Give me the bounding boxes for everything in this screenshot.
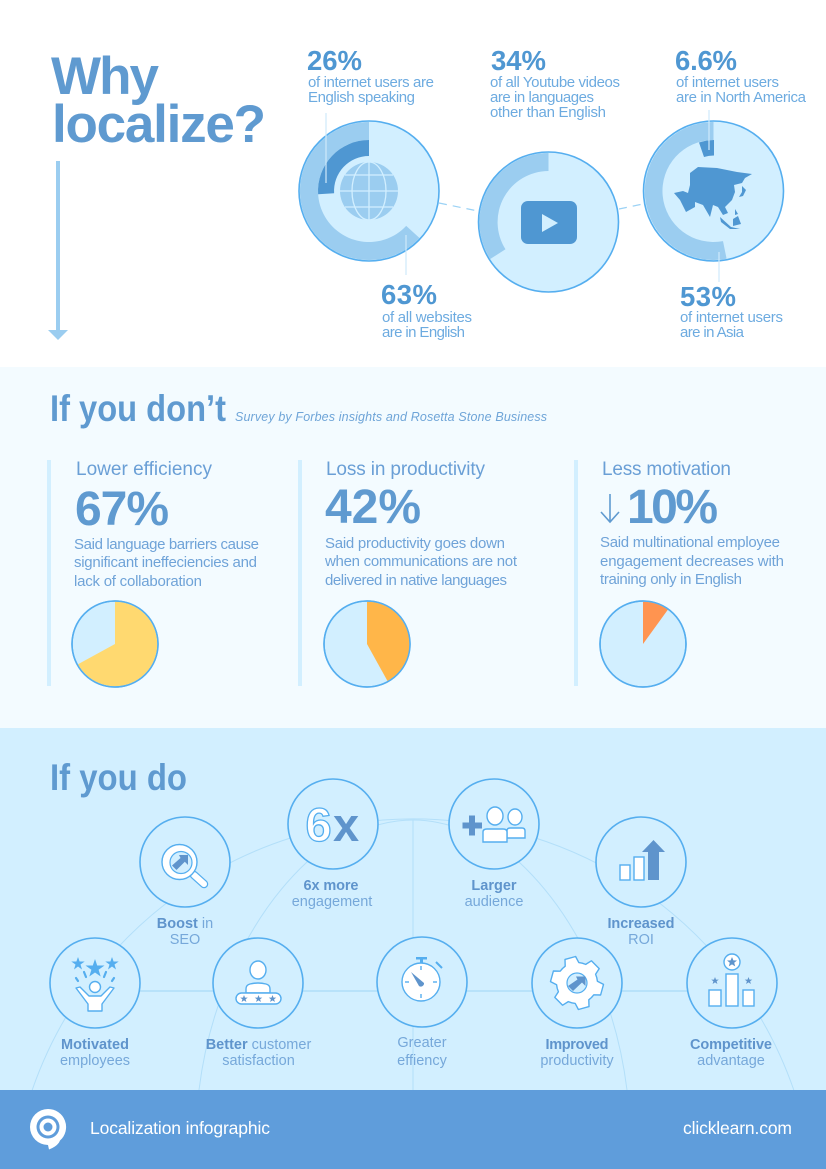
panel: less motivation: training only in English xyxy=(600,571,742,588)
item: larger audience: Larger xyxy=(471,878,517,894)
heading: If you do: If you do xyxy=(50,757,187,798)
icon: people with plus xyxy=(462,807,525,842)
leader lines xyxy=(326,110,719,282)
pie chart: 42% xyxy=(324,601,410,687)
panel: lower efficiency: 67% xyxy=(75,483,169,536)
item: motivated employees xyxy=(50,938,140,1069)
icon: Asia map xyxy=(674,167,752,229)
panel: lower efficiency xyxy=(47,459,259,687)
item: larger audience xyxy=(449,779,539,910)
panel: lower efficiency: significant ineffeciencies and xyxy=(74,554,257,571)
item: increased ROI: ROI xyxy=(628,932,654,948)
item: better customer satisfaction: satisfaction xyxy=(222,1053,295,1069)
icon: play button xyxy=(521,201,577,244)
stat: 34% xyxy=(490,45,620,121)
panel: loss in productivity: when communications are not xyxy=(324,553,518,570)
stat: 63% xyxy=(381,279,472,341)
stat: 53%: of internet users xyxy=(680,309,783,326)
heading: If you don't: If you don’t xyxy=(50,388,226,429)
item: motivated employees: Motivated xyxy=(61,1037,129,1053)
stat: 63%: are in English xyxy=(382,324,465,341)
icon: globe xyxy=(340,162,398,220)
panel: lower efficiency: lack of collaboration xyxy=(74,573,202,590)
icon: 6x: x xyxy=(333,798,359,851)
stat: 6.6%: of internet users xyxy=(676,74,779,91)
item: 6x more engagement xyxy=(288,779,378,910)
stat: 26%: of internet users are xyxy=(308,74,434,91)
panel: less motivation: Said multinational employee xyxy=(600,534,780,551)
panel: lower efficiency: Lower efficiency xyxy=(76,459,212,480)
panel: less motivation: Less motivation xyxy=(602,459,731,480)
stat: 26% xyxy=(307,45,434,106)
icon: down arrow xyxy=(601,494,619,522)
panel: less motivation xyxy=(574,459,784,687)
item: boost in SEO: Boost in xyxy=(157,916,213,932)
stat: 34%: are in languages xyxy=(490,89,594,106)
stat: 26%: English speaking xyxy=(308,89,415,106)
item: increased ROI xyxy=(596,817,686,948)
footer xyxy=(0,1090,826,1169)
item: 6x more engagement: 6x more xyxy=(304,878,358,894)
panel: loss in productivity: Said productivity goes down xyxy=(325,535,505,552)
arrow: down xyxy=(48,161,68,340)
footer: Localization infographic xyxy=(90,1118,270,1138)
stat: 63%: 63% xyxy=(381,279,437,310)
pie chart: 67% xyxy=(72,601,158,687)
panel: less motivation: 10% xyxy=(627,481,718,534)
stat: 6.6%: 6.6% xyxy=(675,45,737,76)
panel: lower efficiency: Said language barriers cause xyxy=(74,536,259,553)
connectors between stat circles xyxy=(439,203,643,211)
item: better customer satisfaction xyxy=(206,938,311,1069)
item: better customer satisfaction: Better customer xyxy=(206,1037,311,1053)
icon: 6x xyxy=(306,798,359,851)
chart: Youtube videos donut xyxy=(478,152,618,292)
icon: stopwatch xyxy=(402,957,442,1001)
stat: 34%: 34% xyxy=(491,45,546,76)
panel: less motivation: engagement decreases with xyxy=(600,553,784,570)
title: localize? xyxy=(52,95,266,154)
item: competitive advantage xyxy=(687,938,777,1069)
title xyxy=(51,47,266,154)
item: improved productivity: Improved xyxy=(546,1037,608,1053)
item: greater efficiency xyxy=(377,937,467,1069)
item: greater efficiency: effiency xyxy=(397,1053,448,1069)
icon: 6x: 6 xyxy=(306,798,332,851)
panel: loss in productivity: delivered in native languages xyxy=(325,572,507,589)
item: increased ROI: Increased xyxy=(608,916,674,932)
stat: 34%: other than English xyxy=(490,104,606,121)
icon: magnifier xyxy=(162,844,204,884)
stat: 53% xyxy=(680,281,783,341)
item: improved productivity xyxy=(532,938,622,1069)
icon: gear xyxy=(550,956,604,1010)
stat: 53%: 53% xyxy=(680,281,736,312)
item: competitive advantage: Competitive xyxy=(690,1037,772,1053)
item: motivated employees: employees xyxy=(60,1053,130,1069)
icon: person with stars xyxy=(71,957,119,1011)
survey source note: Survey by Forbes insights and Rosetta Stone Business xyxy=(235,410,547,424)
item: greater efficiency: Greater xyxy=(397,1035,447,1051)
item: competitive advantage: advantage xyxy=(697,1053,765,1069)
panel: loss in productivity: Loss in productivity xyxy=(326,459,486,480)
pie chart: 10% xyxy=(600,601,686,687)
item: 6x more engagement: engagement xyxy=(292,894,372,910)
icon: rising bars xyxy=(620,840,665,880)
panel: loss in productivity xyxy=(298,459,518,687)
stat: 53%: are in Asia xyxy=(680,324,745,341)
icon: podium xyxy=(709,954,754,1006)
panel: loss in productivity: 42% xyxy=(325,481,421,534)
item: boost in SEO xyxy=(140,817,230,948)
stat: 6.6%: are in North America xyxy=(676,89,807,106)
item: boost in SEO: SEO xyxy=(170,932,200,948)
icon: customer rating xyxy=(236,961,281,1004)
stat: 26%: 26% xyxy=(307,45,362,76)
connecting arcs xyxy=(32,819,794,1090)
footer: clicklearn.com xyxy=(683,1118,792,1138)
item: larger audience: audience xyxy=(465,894,523,910)
chart: North America and Asia donut xyxy=(644,121,784,261)
chart: English speaking and websites donut xyxy=(299,121,439,261)
stat: 63%: of all websites xyxy=(382,309,472,326)
stat: 34%: of all Youtube videos xyxy=(490,74,620,91)
title: Why xyxy=(51,47,160,106)
item: improved productivity: productivity xyxy=(540,1053,614,1069)
logo xyxy=(30,1109,66,1150)
stat: 6.6% xyxy=(675,45,807,106)
